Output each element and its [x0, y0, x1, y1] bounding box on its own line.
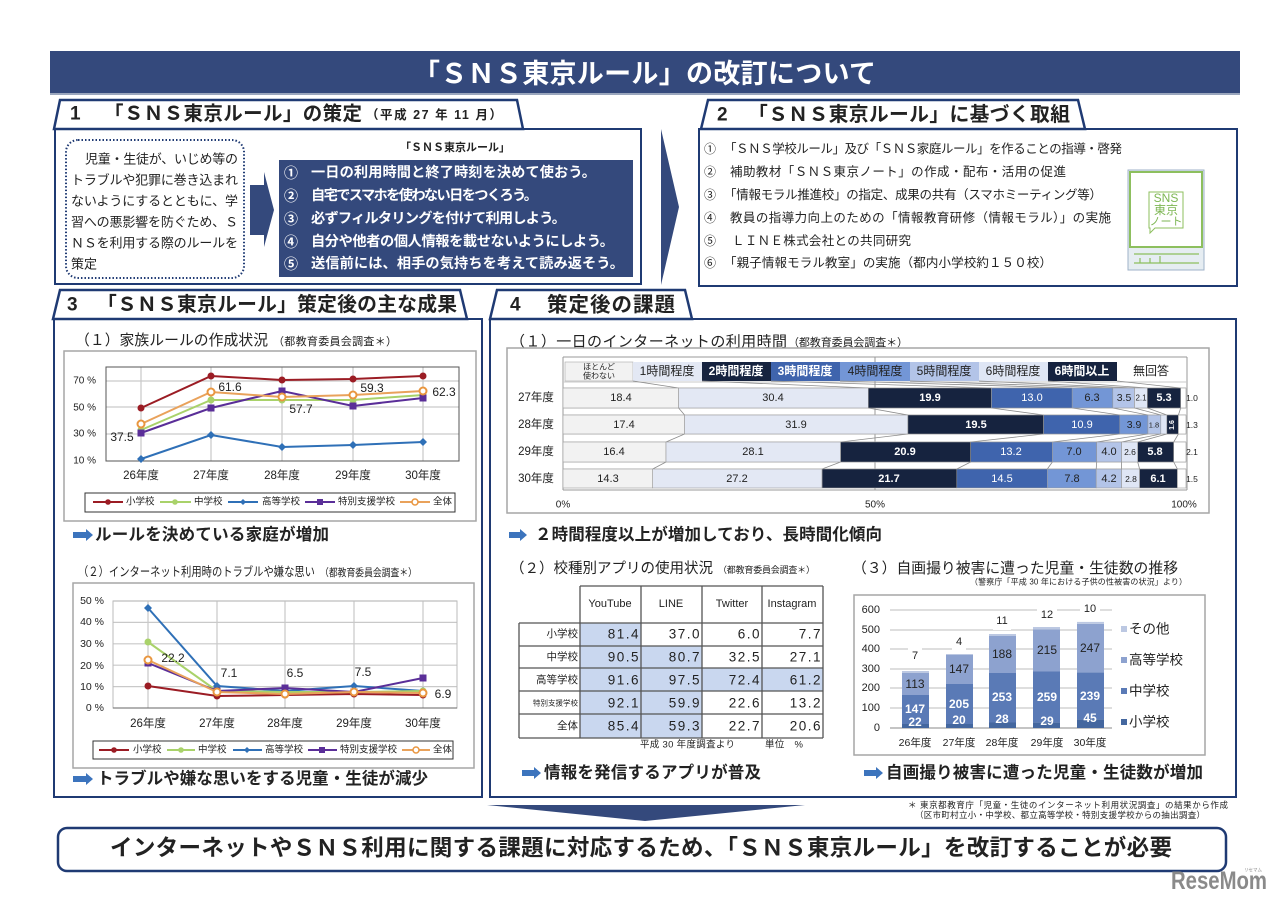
- list: five rules: ④: [284, 234, 298, 250]
- legend: usage time categories: ほとんど: [583, 362, 615, 372]
- bar: 27年度: 20: [952, 713, 966, 727]
- legend: usage time categories: 6時間程度: [986, 363, 1040, 378]
- bar: 27年度: 2.1: [1135, 394, 1147, 402]
- table: app usage by school type: LINE: [659, 598, 683, 610]
- bar: 27年度: 205: [949, 697, 969, 711]
- text block: purpose in dotted box: トラブルや犯罪に巻き込まれ: [71, 172, 238, 188]
- bar: 28年度: 31.9: [785, 419, 807, 431]
- chart heading: internet usage time: （１）一日のインターネットの利用時間: [510, 334, 787, 350]
- stacked bar chart: victims by school type: 400: [862, 643, 880, 655]
- text block: purpose in dotted box: 習への悪影響を防ぐため、Ｓ: [71, 214, 238, 230]
- bar: 27年度: 1.0: [1186, 393, 1198, 403]
- line chart: family rule creation: 70 %: [73, 376, 96, 386]
- panel: section 3 outcomes: [53, 290, 482, 797]
- heading: section 4 tab: [490, 290, 692, 319]
- bar: 28年度: 28年度: [518, 417, 554, 431]
- table: app usage by school type: 61.2: [790, 672, 822, 688]
- bar: 26年度: [899, 648, 932, 749]
- table: app usage by school type: Twitter: [716, 598, 749, 610]
- line chart: internet trouble: [73, 583, 474, 768]
- conclusion: internet trouble: トラブルや嫌な思いをする児童・生徒が減少: [97, 768, 428, 788]
- conclusion: usage time: ２時間程度以上が増加しており、長時間化傾向: [535, 524, 882, 544]
- stacked bar chart: victims by school type: 0: [874, 722, 880, 734]
- heading: section 1 tab: （平成 27 年 11 月）: [366, 107, 502, 122]
- note: survey year and unit: 単位 %: [765, 738, 804, 750]
- series: high school: [144, 604, 427, 695]
- bar: 30年度: 10: [1084, 603, 1096, 615]
- bar: 30年度: 14.3: [597, 473, 619, 485]
- arrow: down to conclusion: [487, 805, 805, 821]
- line chart: family rule creation: 57.7: [289, 402, 313, 416]
- line chart: family rule creation: 30 %: [73, 428, 96, 440]
- list: six initiatives: 「情報モラル推進校」の指定、成果の共有（スマホミーティング等）: [724, 187, 1102, 202]
- bar: 27年度: 147: [949, 662, 969, 676]
- legend: victims chart: 中学校: [1129, 684, 1170, 698]
- table: app usage by school type: 22.7: [729, 718, 761, 734]
- legend: usage time categories: 使わない: [583, 370, 615, 380]
- heading: section 2 tab: 「ＳＮＳ東京ルール」に基づく取組: [748, 103, 1070, 126]
- legend: usage time categories: 5時間程度: [917, 363, 971, 378]
- heading: section 1 tab: 「ＳＮＳ東京ルール」の策定: [104, 103, 362, 125]
- bar: 29年度: 259: [1037, 690, 1057, 704]
- bar: 27年度: 27年度: [943, 736, 976, 749]
- line chart: family rule creation: 27年度: [193, 468, 229, 482]
- table: app usage by school type: 20.6: [790, 718, 822, 734]
- bar: 26年度: 7: [912, 650, 918, 662]
- note: survey year and unit: 平成 30 年度調査より: [640, 738, 735, 750]
- legend: chart 2: [93, 741, 453, 759]
- chart heading: internet trouble: （都教育委員会調査＊）: [320, 566, 417, 579]
- bar: 28年度: [518, 415, 1198, 434]
- panel: section 1 rule establishment: [54, 100, 641, 284]
- legend: victims chart: その他: [1129, 622, 1170, 636]
- legend: usage time categories: 1時間程度: [640, 363, 694, 378]
- legend: usage time categories: 無回答: [1133, 363, 1169, 378]
- line chart: internet trouble: 29年度: [336, 716, 372, 730]
- line chart: internet trouble: 22.2: [161, 651, 185, 665]
- bar: 28年度: 253: [992, 690, 1012, 704]
- table: app usage by school type: 6.0: [738, 626, 761, 642]
- line chart: family rule creation: 62.3: [432, 385, 456, 399]
- callout: bottom conclusion: [58, 828, 1226, 871]
- bar: 28年度: 1.3: [1186, 420, 1198, 430]
- line chart: family rule creation: 26年度: [123, 468, 159, 482]
- line chart: family rule creation: 37.5: [110, 430, 134, 444]
- footnote: survey source: [908, 800, 1228, 820]
- title banner: 「ＳＮＳ東京ルール」の改訂について: [413, 59, 876, 89]
- table: app usage by school type: 90.5: [608, 650, 640, 664]
- line chart: family rule creation: 29年度: [335, 468, 371, 482]
- heading: section 2 tab: [701, 100, 1085, 129]
- bar: 28年度: 1.6: [1169, 420, 1176, 430]
- conclusion: victims: 自画撮り被害に遭った児童・生徒数が増加: [886, 762, 1203, 782]
- note: survey year and unit: [640, 738, 804, 750]
- bar: 29年度: 13.2: [1000, 446, 1022, 458]
- chart heading: self-portrait victims: （警察庁「平成 30 年における子供の性被害の状況」より）: [970, 576, 1187, 586]
- bar: 30年度: 30年度: [518, 471, 554, 485]
- table: app usage by school type: 85.4: [608, 718, 640, 734]
- legend: victims chart: [1121, 622, 1183, 730]
- list: six initiatives: 「親子情報モラル教室」の実施（都内小学校約１５０校）: [724, 255, 1052, 270]
- legend: victims chart: 小学校: [1129, 714, 1170, 730]
- chart heading: internet trouble: （２）インターネット利用時のトラブルや嫌な思い: [78, 564, 315, 579]
- line chart: internet trouble: 6.5: [287, 666, 304, 680]
- table: app usage by school type: 27.1: [790, 650, 822, 664]
- list: five rules: ②: [284, 188, 298, 204]
- table heading: app use: （都教育委員会調査＊）: [718, 564, 815, 575]
- bar: 26年度: 147: [905, 702, 925, 716]
- bar: 29年度: 20.9: [894, 446, 916, 458]
- heading: section 4 tab: 4: [510, 294, 521, 316]
- bar: 30年度: 6.1: [1150, 473, 1166, 485]
- line chart: internet trouble: 6.9: [435, 687, 452, 701]
- text block: purpose in dotted box: [66, 140, 244, 278]
- heading: section 3 tab: 「ＳＮＳ東京ルール」策定後の主な成果: [97, 293, 457, 316]
- bar: 29年度: [518, 442, 1198, 462]
- legend: chart 1: 小学校: [126, 496, 155, 508]
- footnote: survey source: （区市町村立小・中学校、都立高等学校・特別支援学校からの抽出調査）: [915, 810, 1205, 820]
- table: app usage by school type: 91.6: [608, 672, 640, 688]
- series: overall: [144, 656, 426, 698]
- bar: 30年度: 7.8: [1064, 473, 1080, 485]
- table: app usage by school type: 92.1: [608, 696, 640, 710]
- line chart: family rule creation: 30年度: [405, 468, 441, 482]
- table: app usage by school type: 22.6: [729, 696, 761, 710]
- line chart: family rule creation: 10 %: [73, 456, 96, 466]
- bar: 29年度: 2.1: [1186, 447, 1198, 457]
- table: app usage by school type: 59.3: [669, 718, 701, 734]
- bar: 27年度: 27年度: [518, 390, 554, 404]
- line chart: internet trouble: 10 %: [80, 681, 104, 693]
- series: high school: [137, 431, 427, 463]
- conclusion: app use: 情報を発信するアプリが普及: [544, 762, 762, 782]
- list: six initiatives: ②: [704, 165, 716, 179]
- line chart: internet trouble: 7.5: [355, 665, 372, 679]
- footnote: survey source: ＊ 東京都教育庁「児童・生徒のインターネット利用状況調査」の結果から作成: [908, 800, 1228, 810]
- line chart: internet trouble: 30 %: [80, 638, 104, 650]
- table: app usage by school type: 13.2: [790, 696, 822, 710]
- icon: SNS Tokyo notebook: [1128, 170, 1204, 270]
- bar: 29年度: 29年度: [1031, 736, 1064, 749]
- bar: 28年度: 188: [992, 647, 1012, 661]
- bar: 29年度: 2.6: [1124, 447, 1136, 457]
- line chart: family rule creation: 28年度: [264, 468, 300, 482]
- bar: 30年度: 27.2: [726, 473, 748, 485]
- line chart: family rule creation: [64, 351, 476, 521]
- series: junior high: [144, 638, 426, 696]
- bar: 30年度: 1.5: [1186, 474, 1198, 484]
- table heading: app use: （２）校種別アプリの使用状況: [510, 560, 713, 577]
- bar: 27年度: 13.0: [1021, 392, 1043, 404]
- list: six initiatives: ⑤: [704, 234, 716, 248]
- panel: section 2 initiatives: [699, 100, 1237, 286]
- chart heading: family rules: （１）家族ルールの作成状況: [75, 332, 268, 349]
- list: six initiatives: ＬＩＮＥ株式会社との共同研究: [732, 233, 911, 248]
- text block: purpose in dotted box: 策定: [71, 256, 97, 272]
- table: app usage by school type: 97.5: [669, 672, 701, 688]
- stacked bar chart: victims by school type: 500: [862, 624, 880, 636]
- list: six initiatives: 補助教材「ＳＮＳ東京ノート」の作成・配布・活用の促進: [730, 164, 1066, 179]
- bar: 29年度: [1031, 606, 1064, 749]
- panel: section 4 issues: [490, 290, 1236, 797]
- chart heading: family rules: [75, 332, 397, 349]
- icon: SNS Tokyo notebook: 東京: [1154, 203, 1178, 217]
- heading: section 1 tab: [54, 100, 523, 129]
- arrow: section 1 to section 2: [661, 129, 679, 285]
- arrow: purpose to rules: [250, 172, 274, 247]
- list: six initiatives: 「ＳＮＳ学校ルール」及び「ＳＮＳ家庭ルール」を作ることの指導・啓発: [724, 141, 1122, 156]
- chart heading: internet usage time: [510, 334, 908, 350]
- bar: 30年度: 2.8: [1125, 474, 1137, 484]
- callout: bottom conclusion: インターネットやＳＮＳ利用に関する課題に対応するため、「ＳＮＳ東京ルール」を改訂することが必要: [110, 834, 1172, 860]
- list: five rules: ③: [284, 211, 298, 227]
- heading: section 3 tab: [53, 290, 467, 319]
- conclusion: family rules: ルールを決めている家庭が増加: [95, 524, 329, 544]
- list: five rules: 送信前には、相手の気持ちを考えて読み返そう。: [311, 255, 624, 272]
- bar: 30年度: [1074, 602, 1107, 749]
- stacked bar chart: victims by school type: 600: [862, 604, 880, 616]
- list: six initiatives: ③: [704, 188, 716, 202]
- bar: 28年度: 1.8: [1149, 420, 1159, 430]
- line chart: internet trouble: 40 %: [80, 616, 104, 628]
- bar: 30年度: 21.7: [878, 473, 900, 485]
- series: elementary: [138, 372, 426, 412]
- line chart: internet trouble: 27年度: [199, 716, 235, 730]
- bar: 29年度: 7.0: [1066, 446, 1082, 458]
- bar: 30年度: 14.5: [991, 473, 1013, 485]
- table heading: app use: [510, 560, 815, 577]
- list: five rules: ⑤: [284, 256, 298, 272]
- bar: 30年度: 45: [1083, 711, 1097, 725]
- table: app usage by school type: 7.7: [799, 626, 822, 642]
- bar: 27年度: 19.9: [919, 392, 941, 404]
- list: five rules: 必ずフィルタリングを付けて利用しよう。: [311, 210, 566, 227]
- line chart: internet trouble: 28年度: [267, 716, 303, 730]
- heading: section 2 tab: 2: [717, 104, 728, 126]
- stacked bar chart: daily internet time: [507, 348, 1209, 513]
- table: app usage by school type: YouTube: [588, 598, 632, 610]
- bar: 29年度: 4.0: [1101, 446, 1117, 458]
- bar: 27年度: 3.5: [1117, 392, 1131, 404]
- list: six initiatives: 教員の指導力向上のための「情報教育研修（情報モラル）」の実施: [730, 210, 1111, 225]
- legend: usage time categories: [565, 362, 1186, 381]
- bar: 29年度: 29年度: [518, 444, 554, 458]
- bar: 28年度: 19.5: [965, 419, 987, 431]
- logo: ReseMom watermark: リセマム: [1244, 868, 1262, 874]
- legend: usage time categories: 4時間程度: [848, 363, 902, 378]
- line chart: family rule creation: 59.3: [360, 381, 384, 395]
- list: five rules: 自宅でスマホを使わない日をつくろう。: [311, 187, 538, 204]
- legend: chart 1: 高等学校: [262, 496, 301, 508]
- line chart: internet trouble: 50 %: [80, 595, 104, 607]
- table: app usage by school type: 小学校: [546, 627, 578, 640]
- chart heading: family rules: （都教育委員会調査＊）: [273, 334, 397, 348]
- series: special needs: [138, 388, 426, 436]
- stacked bar chart: daily internet time: 0%: [556, 500, 570, 510]
- legend: chart 2: 高等学校: [265, 744, 304, 756]
- heading: section 3 tab: 3: [67, 294, 78, 316]
- legend: chart 1: 全体: [433, 496, 453, 508]
- series: special needs: [144, 660, 426, 696]
- legend: chart 2: 中学校: [198, 744, 227, 756]
- bar: 28年度: [986, 612, 1019, 749]
- text block: purpose in dotted box: ＮＳを利用する際のルールを: [71, 236, 238, 250]
- chart heading: self-portrait victims: （３）自画撮り被害に遭った児童・生徒数の推移: [852, 559, 1178, 577]
- table: app usage by school type: 72.4: [729, 672, 761, 688]
- line chart: family rule creation: 50 %: [73, 402, 96, 414]
- table: app usage by school type: Instagram: [768, 598, 816, 610]
- title banner: [50, 51, 1240, 95]
- bar: 28年度: 10.9: [1071, 419, 1093, 431]
- legend: usage time categories: 3時間程度: [778, 363, 832, 378]
- stacked bar chart: victims by school type: [854, 595, 1205, 755]
- table: app usage by school type: 59.9: [669, 696, 701, 710]
- list: five rules: [279, 160, 633, 277]
- series: overall: [138, 388, 426, 428]
- text block: purpose in dotted box: ないようにするとともに、学: [71, 194, 238, 208]
- bar: 30年度: 239: [1080, 689, 1100, 703]
- bar: 29年度: 215: [1037, 643, 1057, 657]
- bar: 27年度: [943, 634, 976, 749]
- bar: 29年度: 28.1: [742, 446, 764, 458]
- legend: usage time categories: 6時間以上: [1055, 363, 1109, 378]
- legend: chart 2: 小学校: [133, 744, 162, 756]
- table: app usage by school type: 32.5: [729, 650, 761, 664]
- table: app usage by school type: 81.4: [608, 626, 640, 642]
- bar: 29年度: 16.4: [603, 446, 625, 458]
- stacked bar chart: daily internet time: 50%: [865, 500, 885, 510]
- legend: usage time categories: 2時間程度: [709, 363, 763, 378]
- list: six initiatives: ④: [704, 211, 716, 225]
- list: five rules: 一日の利用時間と終了時刻を決めて使おう。: [311, 164, 596, 181]
- bar: 30年度: 4.2: [1101, 473, 1117, 485]
- bar: 27年度: 4: [956, 636, 962, 648]
- bar: 30年度: 30年度: [1074, 736, 1107, 749]
- text block: purpose in dotted box: 児童・生徒が、いじめ等の: [85, 152, 238, 166]
- bar: 26年度: 26年度: [899, 736, 932, 749]
- stacked bar chart: victims by school type: 200: [862, 682, 880, 694]
- bar: 28年度: 17.4: [613, 419, 635, 431]
- legend: chart 1: [85, 493, 455, 512]
- icon: SNS Tokyo notebook: ノート: [1150, 216, 1182, 228]
- line chart: internet trouble: 30年度: [405, 716, 441, 730]
- bar: 28年度: 11: [996, 615, 1008, 627]
- table: app usage by school type: 全体: [557, 719, 578, 732]
- table: app usage by school type: 37.0: [669, 626, 701, 642]
- bar: 27年度: [518, 388, 1198, 408]
- stacked bar chart: victims by school type: 100: [862, 702, 880, 714]
- series: elementary: [144, 682, 426, 700]
- bar: 27年度: 5.3: [1156, 392, 1172, 404]
- bar: 30年度: [518, 469, 1198, 488]
- table: app usage by school type: 特別支援学校: [533, 698, 578, 708]
- bar: 29年度: 29: [1040, 714, 1054, 728]
- connectors between bars: [633, 381, 1181, 469]
- bar: 27年度: 18.4: [610, 392, 632, 404]
- list: five rules: ①: [284, 165, 298, 181]
- stacked bar chart: victims by school type: 300: [862, 663, 880, 675]
- legend: victims chart: 高等学校: [1129, 652, 1183, 668]
- heading: section 4 tab: 策定後の課題: [547, 294, 676, 316]
- chart heading: self-portrait victims: [852, 559, 1187, 586]
- bar: 30年度: 247: [1080, 641, 1100, 655]
- chart heading: internet usage time: （都教育委員会調査＊）: [788, 335, 908, 349]
- heading: section 1 tab: 1: [70, 104, 81, 124]
- legend: chart 1: 中学校: [194, 496, 223, 508]
- bar: 28年度: 28年度: [986, 736, 1019, 749]
- table: app usage by school type: [519, 586, 823, 738]
- bar: 28年度: 3.9: [1127, 419, 1141, 431]
- stacked bar chart: daily internet time: 100%: [1171, 500, 1197, 510]
- bar: 26年度: 22: [908, 715, 922, 729]
- line chart: internet trouble: 26年度: [130, 716, 166, 730]
- list: six initiatives: ①: [704, 142, 716, 156]
- table: app usage by school type: 高等学校: [536, 673, 578, 686]
- table: app usage by school type: 中学校: [546, 650, 578, 663]
- line chart: internet trouble: 20 %: [80, 660, 104, 672]
- bar: 27年度: 30.4: [762, 392, 784, 404]
- icon: SNS Tokyo notebook: SNS: [1154, 191, 1178, 205]
- list: six initiatives: ⑥: [704, 256, 716, 270]
- table: app usage by school type: 80.7: [669, 650, 701, 664]
- bar: 29年度: 5.8: [1147, 446, 1163, 458]
- label: rules heading: 「ＳＮＳ東京ルール」: [400, 140, 510, 154]
- list: five rules: 自分や他者の個人情報を載せないようにしよう。: [311, 233, 614, 250]
- bar: 28年度: 28: [995, 712, 1009, 726]
- legend: chart 1: 特別支援学校: [338, 496, 396, 508]
- bar: 29年度: 12: [1041, 609, 1053, 621]
- line chart: internet trouble: 7.1: [221, 666, 238, 680]
- list: six initiatives: [704, 141, 1122, 270]
- legend: chart 2: 全体: [433, 744, 453, 756]
- line chart: family rule creation: 61.6: [218, 380, 242, 394]
- legend: chart 2: 特別支援学校: [340, 744, 398, 756]
- bar: 26年度: 113: [905, 677, 925, 691]
- line chart: internet trouble: 0 %: [86, 702, 104, 714]
- series: junior high: [138, 392, 426, 434]
- bar: 27年度: 6.3: [1084, 392, 1100, 404]
